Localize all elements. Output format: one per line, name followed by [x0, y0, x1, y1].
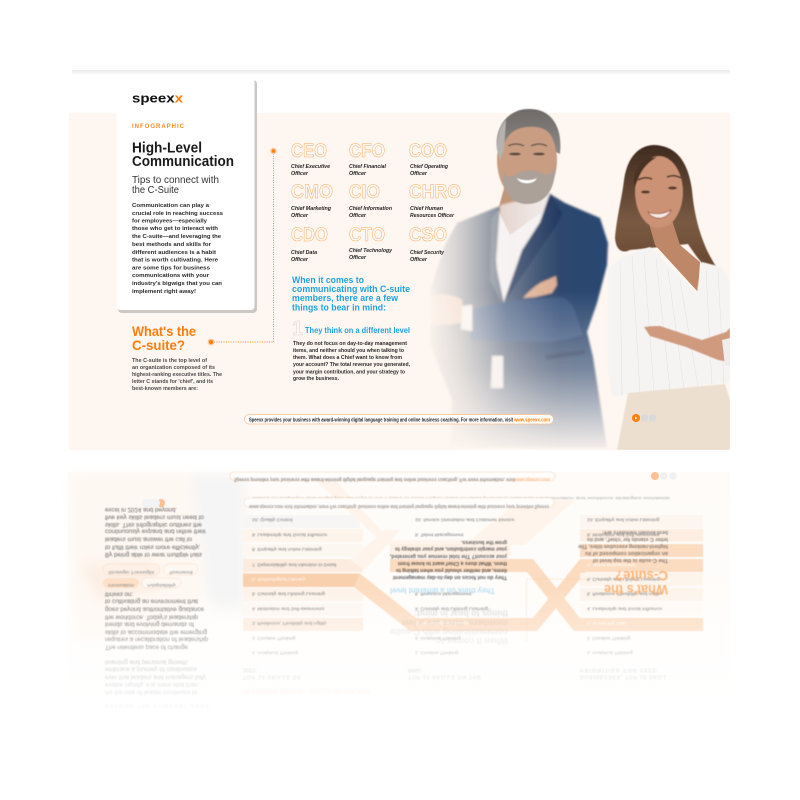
- CFO: [349, 141, 386, 177]
- reflection: list of skills on the rise: 10. Service Orientation and Customer Service: [415, 517, 515, 523]
- reflection: leadership text column: embrace a journey of continuous: [105, 666, 198, 673]
- reflection: tip one: your margin contribution, and your strategy to: [394, 546, 507, 552]
- intro text: industry's bigwigs that you can: [132, 281, 223, 287]
- reflection: leadership text column: goes beyond authoritative guidance: [105, 605, 204, 612]
- blue heading: communicating with the C-suite: [292, 275, 410, 314]
- reflection: What's the C-suite heading: C-suite?: [615, 568, 668, 584]
- CTO: CTO: [349, 225, 385, 246]
- reflection: leadership text column: skills to accommodate the emerging: [105, 628, 207, 635]
- intro text: Communication can play a: [132, 203, 210, 209]
- card body: [116, 79, 254, 310]
- intro text: for employees—especially: [132, 218, 208, 224]
- CIO: CIO: [349, 182, 380, 203]
- reflection: leadership text column: skills. This infographic outlines the: [105, 521, 202, 528]
- reflection: flipped text layer: [103, 472, 670, 708]
- reflection: footer pill: Speexx provides your business with award-winning digital language training and online business coaching. For more information, visit: [234, 476, 515, 482]
- woman: folded arm: [644, 326, 730, 362]
- reflection: list of skills on the rise: 1. Creative Thinking: [415, 650, 459, 656]
- title: Communication: [132, 154, 234, 170]
- blue heading: communicating with the C-suite: communicating with C-suite: [292, 284, 410, 295]
- reflection: list of business priorities: 5. Resilience, Flexibility and Agility: [587, 590, 662, 596]
- reflection: list of business priorities: BUSINESSES, TOP 10 SKILL: [580, 674, 668, 680]
- CHRO: [409, 182, 461, 219]
- C-suite description: highest-ranking executive titles. The: [132, 372, 222, 378]
- reflection: leadership skill pills: Teamwork: [169, 569, 194, 575]
- C-suite description: The C-suite is the top level of: [132, 358, 207, 364]
- blue heading: communicating with the C-suite: members, there are a few: [292, 293, 398, 304]
- reflection: list of 2023 top skills: 4. Motivation and Self-awareness: [252, 605, 325, 611]
- main panel background: [69, 113, 730, 450]
- tip body text: [293, 341, 410, 382]
- CHRO: Chief Human: [410, 206, 444, 212]
- tip number 1: 1: [292, 318, 303, 340]
- subtitle: Tips to connect with: [132, 175, 219, 186]
- reflection: list of business priorities: 3. AI and Big Data: [587, 620, 627, 626]
- reflection: list of skills on the rise: 3. Technological Literacy: [415, 620, 469, 626]
- tip body text: your account? The total revenue you generated,: [293, 362, 410, 368]
- intro text: crucial role in reaching success: [132, 211, 223, 217]
- reflection: mirrored infographic sheets below the main panel: [60, 472, 740, 730]
- CSO: CSO: [409, 225, 447, 246]
- CHRO: Resources Officer: [410, 213, 455, 219]
- reflection: leadership text column: requires a recalibration of leadership: [105, 635, 208, 642]
- reflection: What's the C-suite heading: [604, 568, 668, 598]
- reflection: leadership text column: continuously expand and refine their: [105, 528, 207, 535]
- CDO: Officer: [291, 257, 309, 263]
- reflection: What's the C-suite heading: What's the: [604, 582, 668, 598]
- COO: [409, 141, 449, 177]
- CDO: CDO: [291, 225, 328, 246]
- reflection: list of business priorities: 2. Creative Thinking: [587, 635, 631, 641]
- title: [132, 141, 234, 170]
- CEO: Chief Executive: [291, 164, 330, 170]
- reflection: list of 2023 top skills: 8. Empathy and Active Listening: [252, 546, 322, 552]
- intro text: different audiences is a habit: [132, 250, 216, 256]
- info card: [116, 79, 257, 313]
- reflection: blue heading: When it comes to: [436, 635, 508, 646]
- reflection: list of 2023 top skills: 6. Technological Literacy: [252, 576, 306, 582]
- reflection: leadership text column: five key skills leaders must need to: [105, 513, 204, 520]
- reflection: second sheet footer pill: www.speexx.com visit information, more For coaching. business online and training language digital award-winning with business your provides Speexx: [248, 503, 550, 509]
- intro text: communications with your: [132, 273, 210, 279]
- COO: Chief Operating: [410, 164, 449, 170]
- reflection: list of business priorities: 4. Leadership and Social Influence: [587, 605, 662, 611]
- CHRO: CHRO: [409, 182, 461, 203]
- COO: Officer: [410, 171, 428, 177]
- reflection: list of skills on the rise: 5. Resource Management: [415, 590, 472, 596]
- what's the C-suite heading: C-suite?: [132, 337, 185, 353]
- reflection: list of skills on the rise: 2. Analytical Thinking: [415, 635, 461, 641]
- tip heading: They think on a different level: [305, 325, 410, 335]
- woman: hair: [615, 145, 717, 274]
- CEO: [291, 141, 330, 177]
- reflection: list of business priorities: [580, 517, 668, 680]
- CIO: [349, 182, 393, 219]
- woman: striped blouse: [641, 246, 718, 292]
- reflection: blue heading: things to bear in mind:: [414, 608, 508, 618]
- reflection: list of skills on the rise: 4. Curiosity and Lifelong Learning: [415, 605, 488, 611]
- what's the C-suite heading: [132, 323, 196, 353]
- CFO: Officer: [349, 171, 367, 177]
- reflection: leadership text column: to cultivating an environment that: [105, 598, 198, 605]
- reflection: tip one: They think on a different level: [390, 586, 495, 596]
- CIO: Chief Information: [349, 206, 393, 212]
- photo: businesswoman: [608, 145, 730, 450]
- reflection: leadership text column: to fulfil their roles more efficiently,: [105, 543, 200, 550]
- CMO: Chief Marketing: [291, 206, 332, 212]
- top edge shadow of the sheet: [72, 70, 730, 75]
- logo: speexx: speex x: [132, 91, 184, 106]
- reflection: footer pill: www.speexx.com: [513, 476, 550, 482]
- footer pill: www.speexx.com: [513, 417, 550, 423]
- reflection: list of 2023 top skills: 2023:: [243, 667, 257, 673]
- CFO: Chief Financial: [349, 164, 386, 170]
- tip body text: items, and neither should you when talking to: [293, 348, 405, 354]
- reflection: leadership text column: the workforce. Today's leadership: [105, 613, 198, 620]
- reflection: list of business priorities: 9. Motivation and Self-awareness: [587, 531, 660, 537]
- reflection: list of 2023 top skills: AI AND THE CRUCIAL SKILLS ON THE RISE: [243, 688, 371, 694]
- reflection: leadership skill pills: Strategic Foresight: [108, 569, 155, 575]
- reflection: list of 2023 top skills: 7. Dependability and Attention to Detail: [252, 561, 336, 567]
- CDO: [291, 225, 328, 263]
- intro text: the C-suite—and leveraging the: [132, 234, 221, 240]
- reflection: C-suite text: [578, 529, 668, 563]
- reflection: leadership text column: excel in 2024 and beyond.: [105, 506, 177, 513]
- reflection: list of 2023 top skills: 5. Curiosity and Lifelong Learning: [252, 590, 325, 596]
- reflection: list of 2023 top skills: 3. Resilience, Flexibility and Agility: [252, 620, 327, 626]
- reflection: list of 2023 top skills: 10. Quality Control: [252, 517, 293, 523]
- reflection: list of business priorities: 7. Talent Management: [587, 561, 636, 567]
- reflection: list of skills on the rise: 9. Talent Management: [415, 531, 464, 537]
- reflection: blue heading: members, there are a few: [402, 617, 508, 628]
- CDO: Chief Data: [291, 250, 317, 256]
- reflection: rotated copy of the main sheet text: [390, 529, 668, 646]
- tip body text: them. What does a Chief want to know from: [293, 355, 402, 361]
- intro text: those who get to interact with: [132, 226, 219, 232]
- reflection: footer pill: [230, 472, 555, 482]
- reflection: list of skills on the rise: TOP 10 SKILLS ON THE: [408, 674, 481, 680]
- reflection: C-suite text: letter C stands for 'chief', and its: [587, 536, 668, 542]
- reflection: list of 2023 top skills: TOP 10 SKILLS OF: [243, 674, 302, 680]
- CSO: Chief Security: [410, 250, 445, 256]
- reflection: leadership text column: The relentless pace of change: [105, 643, 188, 650]
- blue heading: communicating with the C-suite: things to bear in mind:: [292, 302, 386, 314]
- what's the C-suite heading: What's the: [132, 323, 196, 339]
- reflection: dotted connector: [526, 579, 589, 641]
- man: suit and shirt, fading out: [430, 193, 608, 448]
- reflection: list of business priorities: 10. Empathy and Active Listening: [587, 517, 660, 523]
- reflection: fine print: *Based on employer and employee surveys of the Future of Jobs Report 2023 on skills priorities, business transformation and workforce strategies worldwide: [250, 496, 670, 500]
- CIO: Officer: [349, 213, 367, 219]
- CEO: Officer: [291, 171, 309, 177]
- CTO: Officer: [349, 255, 367, 261]
- reflection: leadership skill pills: [103, 564, 198, 588]
- reflection: list of 2023 top skills: [243, 517, 371, 694]
- CEO: CEO: [291, 141, 327, 162]
- reflection: tip one: items, and neither should you when talking to: [395, 567, 507, 573]
- reflection: leadership skill pills: Innovation: [108, 582, 134, 588]
- woman: face: [634, 156, 683, 228]
- reflection: leadership text column: ever that leaders and managers fully: [105, 673, 207, 680]
- intro text: best methods and skills for: [132, 242, 212, 248]
- reflection background panel: [68, 472, 730, 722]
- reflection: tip one: They do not focus on day-to-day management: [393, 574, 507, 580]
- blue heading: communicating with the C-suite: When it comes to: [292, 275, 364, 286]
- tip body text: your margin contribution, and your strategy to: [293, 370, 406, 376]
- CSO: Officer: [410, 257, 428, 263]
- CSO: [409, 225, 447, 263]
- reflection: C-suite text: best-known members are:: [602, 529, 668, 535]
- reflection: list of business priorities: 1. Analytical Thinking: [587, 650, 633, 656]
- card shadow: [118, 80, 257, 313]
- reflection: leadership text column: By being able to wear multiple hats: [105, 551, 203, 558]
- reflection: leadership skill pills: Adaptability: [147, 582, 177, 588]
- reflection: tip one: them. What does a Chief want to know from: [398, 560, 507, 566]
- reflection: leadership text column: [105, 506, 209, 708]
- reflection: leadership text column: evolve rapidly, it is more vital than: [105, 681, 198, 688]
- C-suite description: best-known members are:: [132, 386, 198, 392]
- reflection: blue heading: communicating with C-suite: [390, 626, 508, 637]
- reflection: list of 2023 top skills: 1. Analytical Thinking: [252, 650, 298, 656]
- reflection: tip one: grow the business.: [461, 539, 507, 545]
- reflection: fade to white: [60, 590, 740, 730]
- reflection: list of skills on the rise: [408, 517, 515, 680]
- dotted connector arrow: [208, 148, 277, 345]
- CMO: CMO: [291, 182, 333, 203]
- reflection: second sheet footer pill: [244, 498, 554, 509]
- reflection: list of skills on the rise: RISE:: [408, 667, 423, 673]
- woman: neck and chest: [648, 220, 700, 292]
- C-suite description: [132, 358, 222, 392]
- reflection: blurred figure silhouettes: [70, 475, 245, 640]
- CTO: [349, 225, 393, 261]
- reflection: leadership text column: learning and personal growth.: [105, 658, 189, 665]
- CMO: [291, 182, 333, 219]
- reflection: carousel dots: [142, 472, 677, 507]
- intro text: that is worth cultivating. Here: [132, 258, 218, 264]
- reflection: leadership text column: thrives on:: [105, 590, 133, 597]
- reflection: leadership text column: BEYOND THE COMFORT ZONE: [105, 702, 209, 708]
- reflection: list of 2023 top skills: 9. Leadership and Social Influence: [252, 531, 327, 537]
- C-suite description: an organization composed of its: [132, 365, 215, 371]
- subtitle: [132, 175, 219, 196]
- title: High-Level: [132, 141, 202, 157]
- label: infographic: INFOGRAPHIC: [132, 124, 185, 130]
- carousel dots: [632, 414, 656, 422]
- footer pill: Speexx provides your business with award-winning digital language training and online business coaching. For more information, visit: [249, 417, 513, 423]
- reflection: leadership text column: trends and evolving demands of: [105, 621, 194, 628]
- subtitle: the C-Suite: [132, 185, 179, 196]
- intro text: implement right away!: [132, 289, 196, 295]
- reflection: list of business priorities: 8. Technological Literacy: [587, 546, 641, 552]
- CMO: Officer: [291, 213, 309, 219]
- reflection: leadership text column: leaders must answer the call to: [105, 535, 192, 542]
- man: neck: [498, 185, 552, 235]
- C-suite description: letter C stands for 'chief', and its: [132, 379, 213, 385]
- reflection: C-suite text: an organization composed of its: [585, 550, 668, 556]
- man: head: [497, 109, 560, 204]
- reflection: list of business priorities: 6. Curiosity and Lifelong Learning: [587, 576, 660, 582]
- reflection: C-suite text: The C-suite is the top level of: [593, 557, 668, 563]
- reflection: leadership text column: As the role of leader continues to: [105, 688, 197, 695]
- woman: beige trousers: [617, 384, 730, 450]
- executive titles grid: [291, 141, 461, 263]
- CFO: CFO: [349, 141, 385, 162]
- photo: businessman with crossed arms: [430, 109, 730, 450]
- reflection: tip one: [390, 539, 507, 596]
- COO: COO: [409, 141, 447, 162]
- reflection: tip one: your account? The total revenue you generated,: [390, 553, 507, 559]
- reflection: blue heading: [390, 608, 508, 646]
- reflection: skill ranking bars and crossing bands: [243, 480, 703, 631]
- reflection: list of business priorities: PRIORITIES FOR 2023:: [580, 667, 658, 673]
- intro text: [132, 203, 223, 295]
- reflection: C-suite text: highest-ranking executive titles. The: [578, 543, 668, 549]
- tip body text: They do not focus on day-to-day management: [293, 341, 407, 347]
- CTO: Chief Technology: [349, 248, 393, 254]
- footer pill: [244, 414, 554, 424]
- tip body text: grow the business.: [293, 376, 339, 382]
- intro text: are some tips for business: [132, 266, 210, 272]
- reflection: list of 2023 top skills: 2. Creative Thinking: [252, 635, 296, 641]
